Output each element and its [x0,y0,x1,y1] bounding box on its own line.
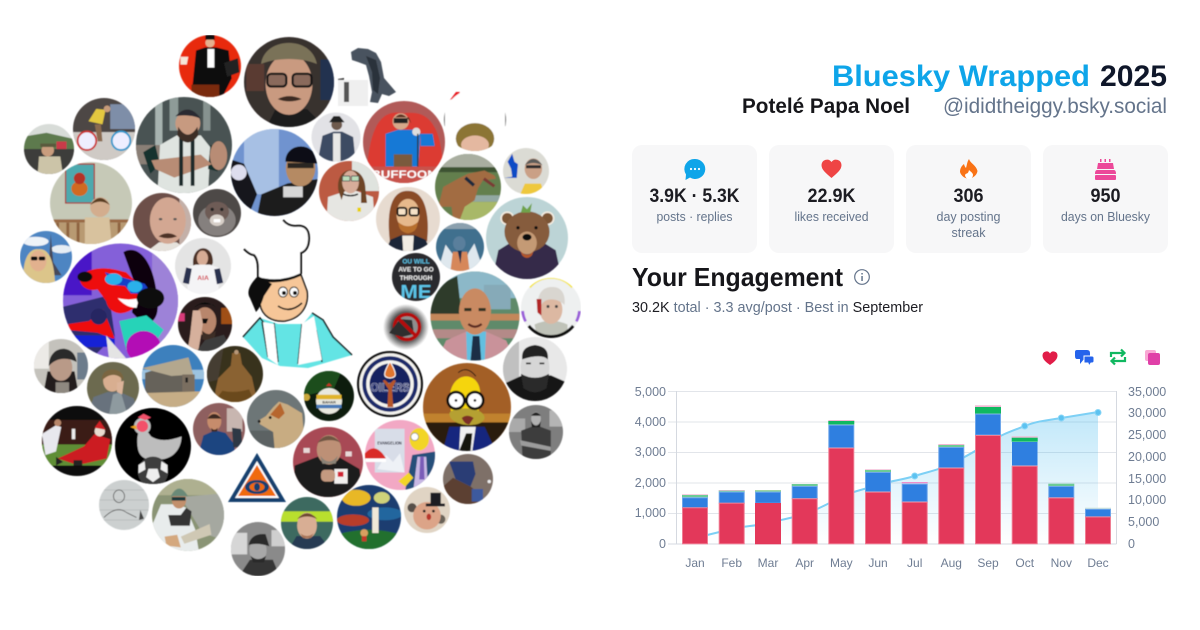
chart grid and axes [668,391,1116,544]
avatar: oilers logo: OILERS [371,380,410,394]
avatar: woman in santa hat with ring [521,277,581,338]
avatar: arms crossed man black and white [509,405,563,459]
avatar: bearded man black and white [503,337,567,401]
avatar: collie dog [247,390,305,448]
avatar: you will have to go through me [392,253,440,302]
avatar: festival man [24,124,74,174]
avatar: you will have to go through me: AVE TO GO [398,267,434,274]
avatar: baby in crib with garfield poster [50,162,132,244]
avatar: simpsons character with poster: EVANGELION [377,440,402,445]
title: Bluesky Wrapped [832,60,1090,93]
stat card: day posting streak [906,145,1031,253]
avatar cloud [20,35,581,576]
right axis labels: 15,000 [1128,472,1166,486]
avatar: bearded man arms crossed [136,97,232,193]
avatar: you will have to go through me: OU WILL [402,258,430,265]
avatar: man by blue figure [503,148,549,194]
avatar: no bugs sign with halo [383,304,429,350]
left axis labels: 2,000 [635,476,666,490]
handle: @ididtheiggy.bsky.social [943,95,1167,118]
avatar: red dog cartoon [63,244,178,363]
avatar: simpsons character with poster [365,420,435,490]
bar: Sep [975,405,1001,544]
illustration: chef mascot [243,220,352,368]
avatar: christmas ornament: BAHAR [322,400,336,404]
month labels: Apr [795,556,814,570]
avatar: bearded cartoon with glasses [376,187,440,251]
left axis labels: 0 [659,537,666,551]
avatar: monkey [193,189,241,237]
left axis labels: 4,000 [635,415,666,429]
engagement chart [635,385,1166,570]
month labels: Dec [1087,556,1109,570]
avatar: brown figure [207,346,263,402]
right axis labels: 30,000 [1128,406,1166,420]
bar: Jun [865,469,891,544]
month labels: Mar [758,556,778,570]
stat card: likes received [769,145,894,253]
month labels: Sep [977,556,999,570]
stat card: likes received: likes received [794,210,869,224]
avatar: old barn [142,345,204,407]
display name: Potelé Papa Noel [742,95,910,118]
right axis labels: 0 [1128,537,1135,551]
bar: Apr [792,484,818,544]
avatar: cyclist [73,98,135,160]
avatar: starry night calvin and hobbes [337,485,403,549]
right axis labels: 25,000 [1128,428,1166,442]
cumulative line [695,410,1101,538]
right axis labels: 35,000 [1128,385,1166,399]
bar: Jul [902,482,928,544]
left axis labels [635,385,666,551]
month labels: Oct [1015,556,1035,570]
bar: Feb [719,490,745,544]
right axis labels [1128,385,1166,551]
icon: flame [960,159,978,179]
avatar: bald man with moustache [133,193,191,251]
avatar: pomeranian with top hat [404,487,450,533]
icon: heart [822,160,842,178]
month labels: Nov [1051,556,1072,570]
avatar: oilers logo [357,351,423,417]
avatar: woman at eiffel tower [20,231,72,283]
avatar: man with cap and glasses [244,37,334,127]
avatar: woman in Tottenham shirt [175,238,231,294]
avatar: christmas ornament [303,371,354,421]
stat card: day posting streak: 306 [954,186,984,207]
chart legend [1042,350,1160,366]
avatar: painted man in hawaiian shirt [193,403,245,455]
icon: birthday cake [1095,159,1116,180]
avatar: woman in beanie [34,339,88,393]
avatar: fly fisherman [152,479,224,551]
legend: reposts [1111,350,1125,364]
heading: your engagement: Your Engagement [632,262,843,292]
avatar: brown dog in field [435,154,501,220]
avatar: you will have to go through me: THROUGH [400,275,433,282]
stat card: likes received: 22.9K [808,186,856,207]
avatar: man in stadium [281,497,333,549]
avatar: facepalm man [178,297,232,351]
avatar: red lips fragment [450,92,460,100]
cumulative area [695,412,1098,544]
title: 2025 [1100,60,1167,93]
stat card: day posting streak: streak [952,226,986,240]
avatar: buffoon podcast [363,101,445,183]
avatar: woman with glasses [319,161,379,221]
stat card: days on Bluesky: days on Bluesky [1061,210,1151,224]
stat card: days on Bluesky: 950 [1090,186,1120,207]
avatar: you will have to go through me: ME [400,281,432,302]
avatar: santa on football pitch [42,406,112,476]
avatar: godzilla toy [338,48,396,106]
icon: speech bubble [684,159,705,180]
left axis labels: 3,000 [635,445,666,459]
avatar: man with dark cap and shades [231,129,318,216]
bar: Mar [755,490,781,544]
left axis labels: 1,000 [635,506,666,520]
avatar: orange tie figure [436,223,484,271]
avatar: klopp with mug [293,427,363,497]
bar: Dec [1085,508,1111,544]
avatar: curly hair man [444,89,506,154]
bar: Nov [1048,484,1074,544]
month labels: Jan [685,556,705,570]
month labels: Feb [721,556,742,570]
avatar: woman in Tottenham shirt: AIA [197,275,209,282]
bar: Jan [682,494,708,544]
avatar: bear in sweater [486,197,568,279]
avatar: chicken on football [115,408,191,487]
month labels [685,556,1109,570]
month labels: Jul [907,556,922,570]
right axis labels: 10,000 [1128,493,1166,507]
avatar: homer simpson [423,363,511,451]
bar: Aug [938,444,964,544]
legend: likes [1042,351,1058,365]
stat card: posts and replies: 3.9K · 5.3K [650,186,740,207]
engagement summary: 30.2K total · 3.3 avg/post · Best in September [632,300,923,316]
right axis labels: 5,000 [1128,515,1159,529]
avatar: pencil sketch [99,480,149,530]
icon: orange triangle eye logo [228,453,286,502]
legend: quotes [1145,350,1160,365]
bar: Oct [1012,436,1038,544]
avatar: man in pink jacket, painted [430,272,520,360]
month labels: May [830,556,853,570]
month labels: Aug [941,556,962,570]
avatar: back of head with blue hat [443,454,493,504]
avatar: beanie man black and white [231,522,285,576]
stat card: day posting streak: day posting [936,210,1001,224]
left axis labels: 5,000 [635,385,666,399]
avatar: man in tuxedo on red [179,35,241,97]
legend: replies [1075,350,1094,366]
stat card: posts and replies [632,145,757,253]
avatar: man hand on cheek [87,362,139,414]
month labels: Jun [868,556,888,570]
icon: info [855,270,869,284]
right axis labels: 20,000 [1128,450,1166,464]
avatar: buffoon podcast: BUFFOON [371,169,437,181]
stat card: posts and replies: posts · replies [656,210,732,224]
avatar: man in suit on white [312,112,360,162]
stat card: days on Bluesky [1043,145,1168,253]
bar: May [828,420,854,544]
